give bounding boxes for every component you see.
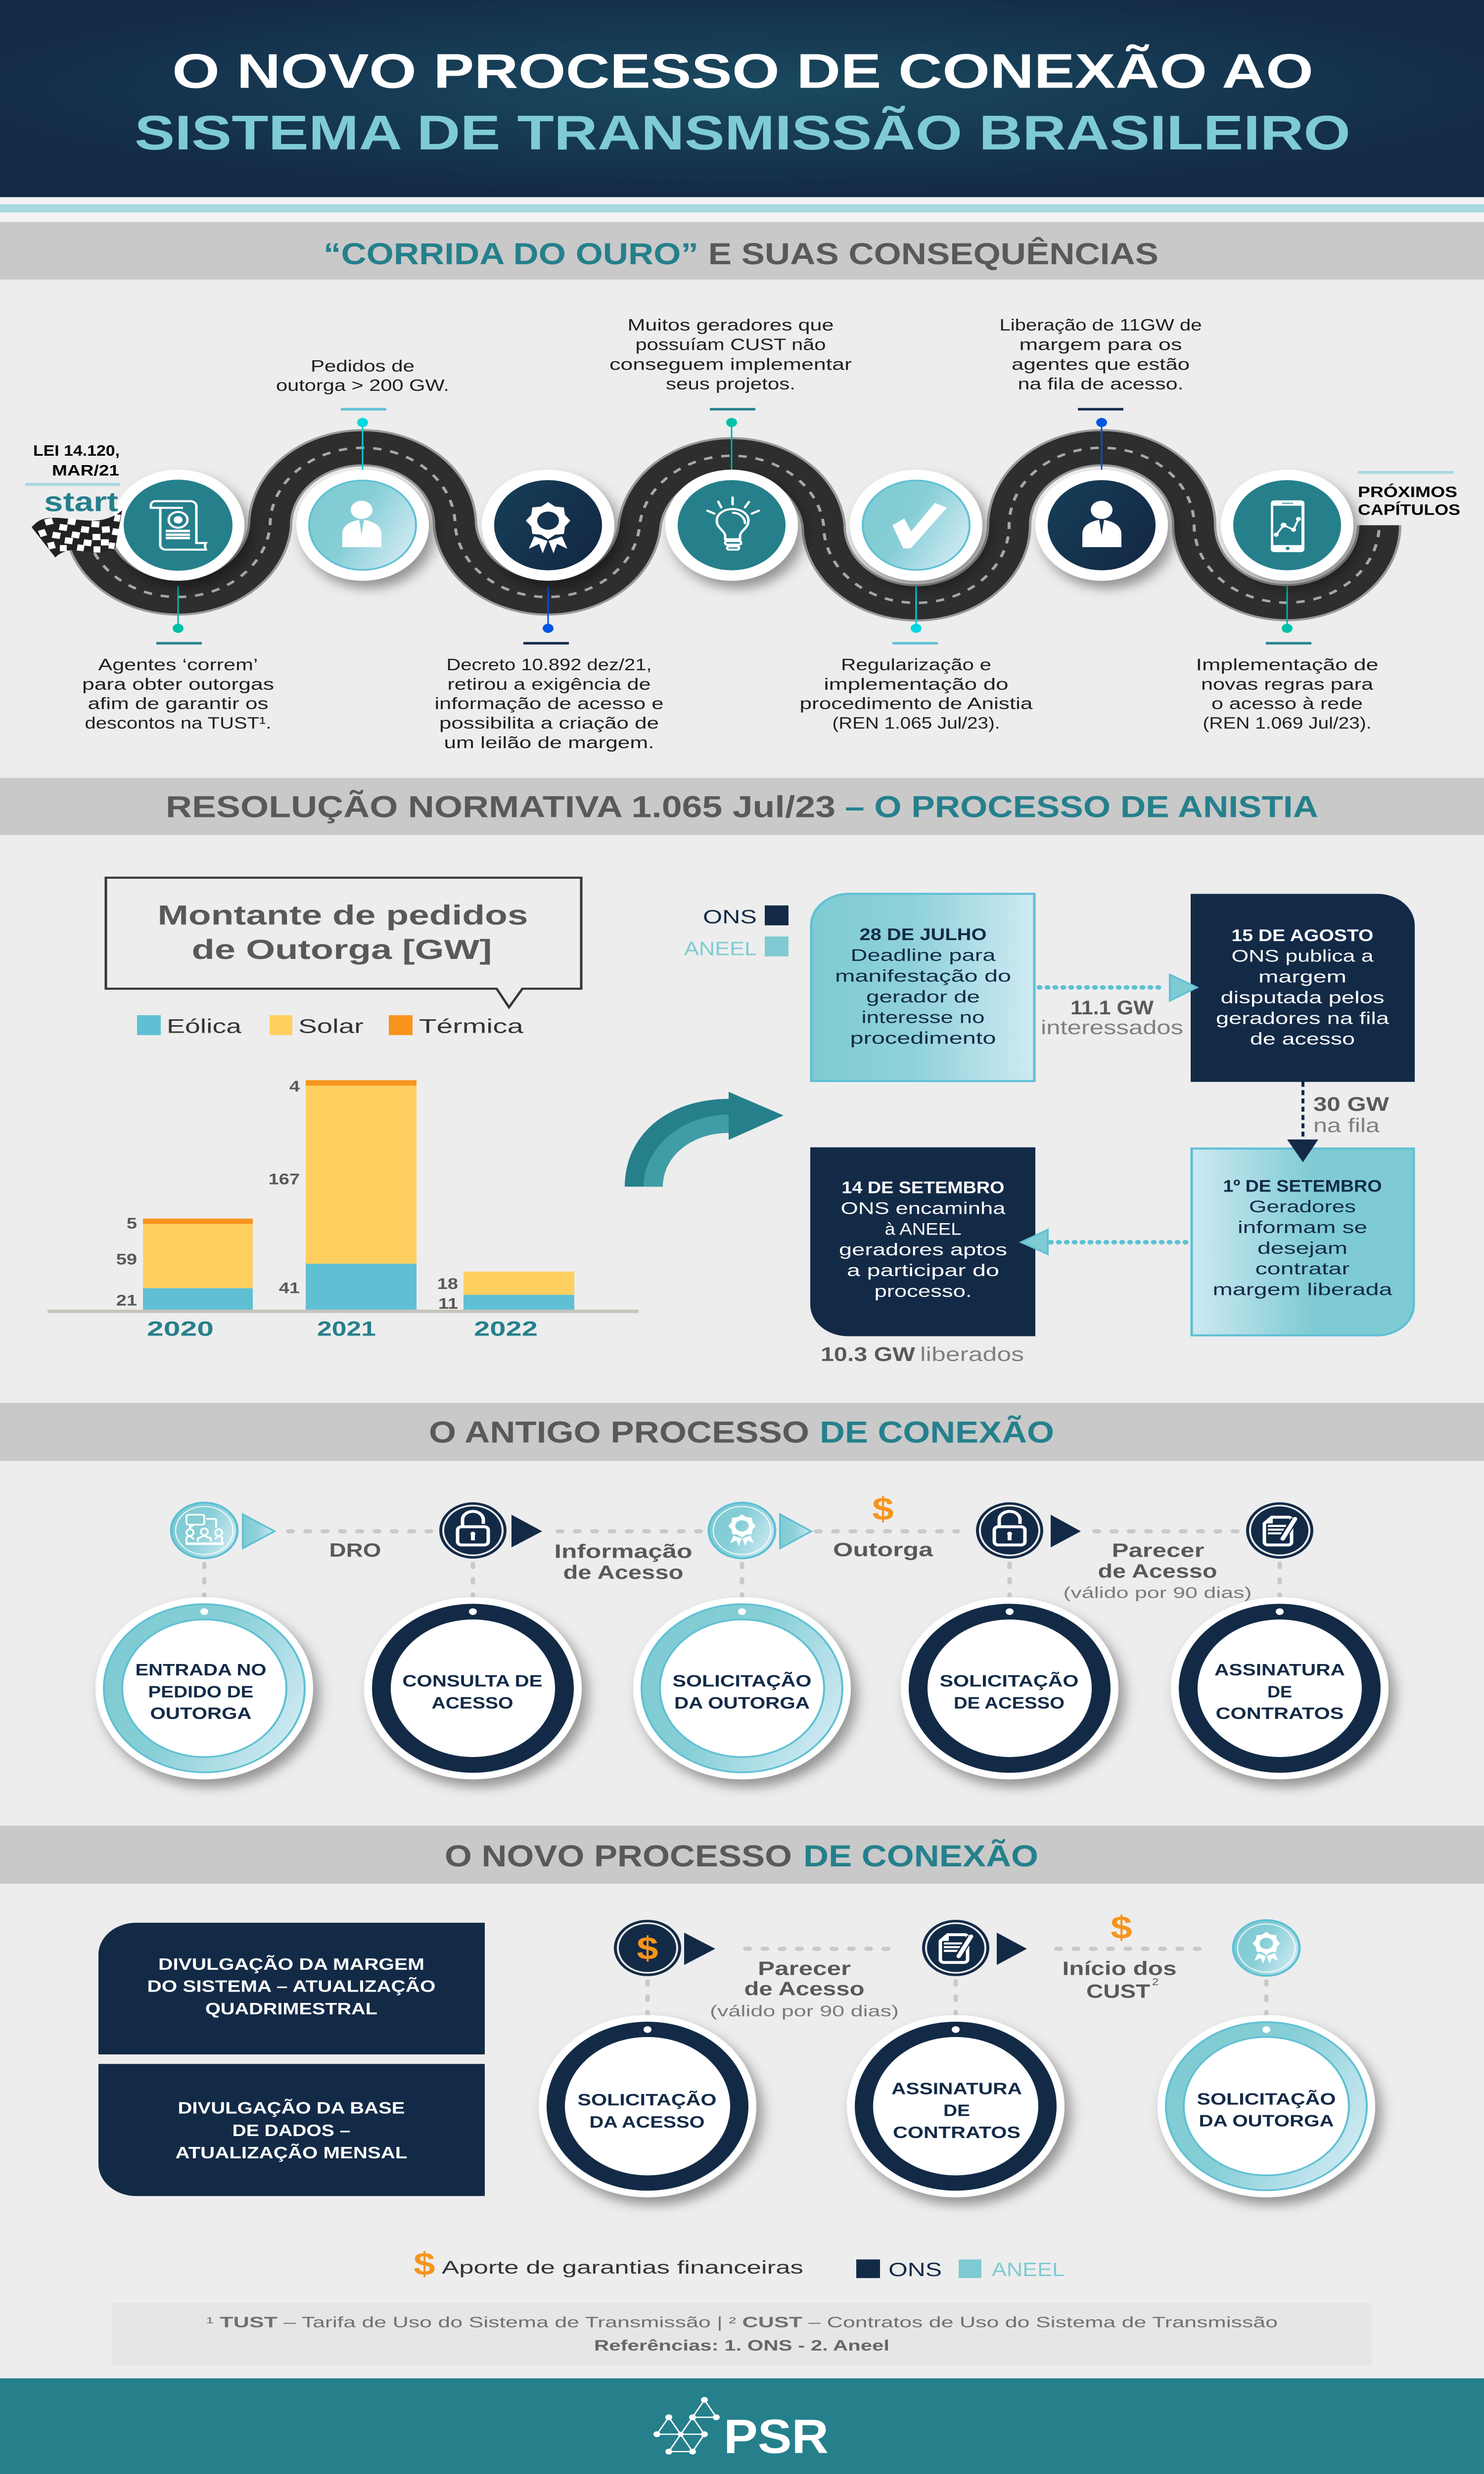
box: 15 de agosto: 15 DE AGOSTO (1232, 926, 1373, 945)
text: implementação: (REN 1.069 Jul/23). (1203, 714, 1371, 732)
circle: solicitação de acesso: SOLICITAÇÃO (940, 1671, 1078, 1690)
footer with PSR logo: PSR (724, 2409, 829, 2463)
box: 1º de setembro: 1º DE SETEMBRO (1223, 1177, 1382, 1196)
box: 15 de agosto: margem (1258, 968, 1346, 987)
text: regularização (799, 655, 1033, 732)
box: 1º de setembro: desejam (1257, 1239, 1347, 1258)
footer with PSR logo (0, 2379, 1484, 2474)
labels: old process: Informação (554, 1541, 692, 1562)
callout: montante de pedidos: Montante de pedidos (158, 900, 528, 930)
pins and connector lines (156, 408, 1311, 645)
circle: assinatura de contratos new: ASSINATURA (891, 2079, 1022, 2098)
connectors: old process (204, 1531, 1280, 1598)
callout: montante de pedidos: de Outorga [GW] (191, 934, 492, 965)
box: divulgação da margem: QUADRIMESTRAL (205, 1999, 377, 2018)
circle: assinatura de contratos (1171, 1597, 1389, 1779)
circle: assinatura de contratos new: DE (943, 2101, 970, 2120)
icon: document (1246, 1502, 1313, 1559)
box: divulgação da margem: DO SISTEMA – ATUALIZAÇÃO (147, 1977, 435, 1996)
text: 10.3 GW liberados: 10.3 GW (821, 1343, 915, 1366)
box: 28 de julho: procedimento (850, 1029, 996, 1048)
section heading: antigo processo: DE CONEXÃO (820, 1416, 1054, 1449)
box: divulgação da base de dados: DE DADOS – (232, 2121, 350, 2140)
bar chart: 11 (438, 1295, 458, 1312)
icon: smartphone chart (1221, 470, 1353, 581)
text: 10.3 GW liberados: liberados (920, 1343, 1024, 1366)
circle: consulta de acesso (364, 1597, 582, 1779)
circle: solicitação de acesso new: SOLICITAÇÃO (577, 2090, 716, 2109)
icon: checkered flag (32, 510, 122, 558)
text: implementação (1196, 655, 1378, 732)
bar chart: 2021 (317, 1317, 376, 1340)
text: liberação de margem: agentes que estão (1012, 355, 1190, 374)
labels: old process: de Acesso (563, 1562, 683, 1583)
section heading: resolução normativa: RESOLUÇÃO NORMATIVA 1.065 Jul/23 (166, 790, 835, 824)
box: 15 de agosto: ONS publica a (1232, 947, 1374, 966)
header panel with title (0, 0, 1484, 222)
connectors: new process (648, 1949, 1266, 2015)
box: 15 de agosto: geradores na fila (1216, 1009, 1390, 1028)
chart legend: Eólica (167, 1015, 241, 1038)
start label: MAR/21 (52, 463, 119, 479)
circle: solicitação de acesso (901, 1597, 1118, 1779)
legend: bottom (414, 2246, 1065, 2282)
circle: assinatura de contratos: CONTRATOS (1216, 1704, 1344, 1722)
bar chart: 2022 (474, 1317, 538, 1340)
box: 1º de setembro (1192, 1148, 1414, 1335)
labels: old process (329, 1491, 1252, 1602)
arrow: 11.1 GW interessados (1039, 975, 1197, 1039)
text: agentes correm (82, 655, 274, 732)
labels: new process: de Acesso (744, 1978, 865, 1999)
text: muitos geradores: conseguem implementar (609, 355, 852, 374)
section heading: antigo processo (0, 1403, 1484, 1461)
text: decreto (434, 655, 664, 752)
box: 14 de setembro (810, 1147, 1035, 1336)
box: 14 de setembro: à ANEEL (884, 1220, 962, 1239)
text: decreto: retirou a exigência de (447, 675, 650, 693)
box: 14 de setembro: geradores aptos (839, 1240, 1007, 1259)
box: 15 de agosto: de acesso (1250, 1030, 1355, 1048)
legend: ONS and ANEEL: ANEEL (684, 938, 757, 959)
text: regularização: Regularização e (841, 655, 991, 674)
section heading: resolução normativa (0, 778, 1484, 835)
section heading: corrida do ouro (0, 222, 1484, 280)
icon: scroll (112, 470, 244, 581)
chart legend: Térmica (419, 1015, 524, 1038)
text: regularização: implementação do (824, 675, 1008, 693)
circle: assinatura de contratos new: CONTRATOS (893, 2123, 1020, 2141)
box: 15 de agosto: disputada pelos (1220, 989, 1384, 1007)
text: pedidos de outorga: outorga > 200 GW. (276, 376, 449, 394)
text: pedidos de outorga: Pedidos de (311, 357, 415, 375)
box: divulgação da base de dados: ATUALIZAÇÃO MENSAL (175, 2143, 408, 2162)
box: 14 de setembro: ONS encaminha (841, 1199, 1006, 1218)
box: divulgação da margem (98, 1923, 485, 2054)
start label: start (44, 486, 118, 517)
chart legend (137, 1015, 524, 1038)
box: 28 de julho: 28 DE JULHO (860, 925, 986, 944)
icon: ribbon badge (482, 470, 614, 581)
header panel with title: SISTEMA DE TRANSMISSÃO BRASILEIRO (135, 105, 1350, 160)
labels: old process: de Acesso (1098, 1561, 1217, 1582)
bar chart: 2020 (147, 1317, 214, 1340)
bar chart (47, 1078, 639, 1340)
icon: person navy (1035, 470, 1168, 581)
arrow: 30 GW na fila: na fila (1313, 1114, 1380, 1137)
icon: dollar: $ (637, 1930, 658, 1966)
box: 14 de setembro: 14 DE SETEMBRO (841, 1179, 1004, 1197)
icon: document new (922, 1920, 1027, 1976)
bar chart: 18 (437, 1275, 458, 1292)
circle: solicitação da outorga new: DA OUTORGA (1199, 2112, 1334, 2130)
bar chart: 5 (127, 1215, 137, 1232)
text: liberação de margem: Liberação de 11GW de (999, 316, 1202, 334)
box: 14 de setembro: a participar do (847, 1261, 999, 1280)
box: divulgação da margem: DIVULGAÇÃO DA MARGEM (158, 1954, 424, 1974)
labels: old process: Outorga (833, 1539, 933, 1560)
circle: consulta de acesso: CONSULTA DE (402, 1672, 542, 1690)
text: regularização: procedimento de Anistia (799, 694, 1033, 713)
text: agentes correm: afim de garantir os (88, 694, 268, 713)
legend: bottom: $ (414, 2246, 435, 2282)
box: 15 de agosto (1191, 894, 1415, 1082)
box: 28 de julho: gerador de (866, 988, 980, 1006)
next chapters label: CAPÍTULOS (1358, 501, 1460, 519)
circle: solicitação da outorga (633, 1597, 851, 1779)
bar chart: 21 (116, 1291, 137, 1309)
box: 28 de julho: manifestação do (835, 967, 1011, 986)
circle: assinatura de contratos: DE (1267, 1682, 1292, 1701)
header panel with title: O NOVO PROCESSO DE CONEXÃO AO (172, 44, 1313, 98)
start label: LEI 14.120, (33, 442, 120, 459)
section heading: corrida do ouro: “CORRIDA DO OURO” E SUAS CONSEQUÊNCIAS (324, 238, 1159, 271)
text: regularização: (REN 1.065 Jul/23). (833, 714, 1000, 732)
footnote box (112, 2303, 1372, 2366)
circle: solicitação de acesso new: DA ACESSO (590, 2113, 704, 2131)
box: 1º de setembro: informam se (1238, 1218, 1367, 1237)
labels: old process: Parecer (1112, 1540, 1205, 1561)
legend: ONS and ANEEL (684, 905, 788, 959)
next chapters label: PRÓXIMOS (1358, 483, 1457, 501)
text: agentes correm: para obter outorgas (82, 675, 274, 693)
labels: new process: (válido por 90 dias) (710, 2002, 899, 2020)
text: muitos geradores: Muitos geradores que (627, 316, 834, 334)
arrow: 30 GW na fila: 30 GW (1313, 1094, 1389, 1115)
box: 1º de setembro: margem liberada (1212, 1281, 1393, 1299)
circle: solicitação de acesso: DE ACESSO (954, 1694, 1065, 1712)
circle: solicitação da outorga new: SOLICITAÇÃO (1197, 2089, 1336, 2108)
circle: entrada no pedido (95, 1597, 313, 1779)
circle: solicitação de acesso new (539, 2015, 756, 2197)
labels: old process: DRO (329, 1539, 381, 1561)
arrow: 11.1 GW interessados: interessados (1041, 1017, 1183, 1039)
legend: bottom: ONS (888, 2259, 942, 2280)
bar chart: 4 (289, 1078, 300, 1095)
box: 28 de julho: Deadline para (851, 946, 996, 965)
text: liberação de margem: margem para os (1019, 335, 1182, 354)
arrow: back to ANEEL (1021, 1230, 1191, 1254)
labels: old process: (válido por 90 dias) (1063, 1584, 1252, 1602)
text: implementação: Implementação de (1196, 655, 1378, 674)
icon: badge new (1233, 1920, 1299, 1976)
icon: person light (296, 470, 429, 581)
circle: solicitação da outorga: SOLICITAÇÃO (672, 1671, 811, 1690)
text: pedidos de outorga (276, 357, 449, 394)
text: agentes correm: descontos na TUST¹. (85, 714, 271, 732)
panel: road timeline (25, 316, 1460, 752)
icon: lock 1 (439, 1502, 542, 1559)
arrow: 30 GW na fila (1287, 1082, 1389, 1162)
section heading: novo processo: O NOVO PROCESSO (445, 1840, 792, 1873)
box: divulgação da base de dados: DIVULGAÇÃO DA BASE (178, 2098, 405, 2117)
text: 10.3 GW liberados (821, 1343, 1024, 1366)
text: liberação de margem: na fila de acesso. (1018, 375, 1183, 393)
chart legend: Solar (298, 1015, 364, 1038)
start label (25, 442, 120, 517)
box: 28 de julho (811, 894, 1034, 1081)
text: muitos geradores: seus projetos. (666, 375, 795, 393)
labels: new process: Parecer (758, 1958, 851, 1979)
circle: consulta de acesso: ACESSO (431, 1694, 513, 1712)
text: decreto: Decreto 10.892 dez/21, (446, 655, 651, 674)
box: 14 de setembro: processo. (875, 1282, 972, 1301)
legend: bottom: ANEEL (992, 2259, 1065, 2280)
legend: bottom: Aporte de garantias financeiras (442, 2257, 803, 2278)
text: implementação: novas regras para (1201, 675, 1374, 693)
box: 28 de julho: interesse no (861, 1008, 984, 1027)
box: divulgação da base de dados (98, 2064, 485, 2196)
circle: solicitação da outorga: DA OUTORGA (674, 1694, 810, 1712)
section heading: resolução normativa: – O PROCESSO DE ANISTIA (845, 790, 1318, 824)
circle: entrada no pedido: OUTORGA (150, 1704, 251, 1722)
bar chart: 167 (269, 1170, 300, 1188)
circle: entrada no pedido: ENTRADA NO (135, 1661, 266, 1679)
circle: assinatura de contratos: ASSINATURA (1214, 1661, 1345, 1679)
callout: montante de pedidos (106, 878, 581, 1007)
circle: solicitação da outorga new (1158, 2015, 1375, 2197)
text: muitos geradores (609, 316, 852, 393)
box: 1º de setembro: contratar (1255, 1260, 1349, 1279)
next chapters label (1358, 471, 1460, 519)
bar chart: 59 (116, 1251, 137, 1268)
text: implementação: o acesso à rede (1211, 694, 1363, 713)
text: decreto: informação de acesso e (434, 694, 664, 713)
text: muitos geradores: possuíam CUST não (635, 335, 826, 354)
text: decreto: possibilita a criação de (439, 714, 659, 732)
bar chart: 41 (279, 1279, 300, 1297)
footnote box: ¹ TUST – Tarifa de Uso do Sistema de Transmissão | ² CUST – Contratos de Uso do Sistema de Transmissão (206, 2314, 1278, 2331)
footnote box: Referências: 1. ONS - 2. Aneel (594, 2337, 889, 2354)
icon: light bulb (665, 470, 798, 581)
section heading: antigo processo: O ANTIGO PROCESSO (429, 1416, 809, 1449)
labels: new process: CUST (1086, 1981, 1150, 2002)
circle: assinatura de contratos new (847, 2015, 1065, 2197)
circle: entrada no pedido: PEDIDO DE (148, 1682, 253, 1701)
text: agentes correm: Agentes ‘correm’ (98, 655, 258, 674)
icon: dollar (614, 1920, 715, 1976)
icon: badge 1 (709, 1503, 811, 1558)
arrow: 11.1 GW interessados: 11.1 GW (1070, 997, 1154, 1019)
arrow: curved (625, 1092, 784, 1187)
labels: new process (710, 1910, 1176, 2020)
labels: new process: Início dos (1062, 1958, 1176, 1979)
labels: old process: $ (872, 1491, 894, 1527)
labels: new process: $ (1111, 1910, 1132, 1946)
labels: new process: 2 (1152, 1976, 1159, 1988)
box: 1º de setembro: Geradores (1249, 1197, 1356, 1216)
road (86, 448, 1379, 603)
text: liberação de margem (999, 316, 1202, 393)
icon: lock 2 (976, 1502, 1081, 1559)
section heading: novo processo: DE CONEXÃO (803, 1840, 1038, 1873)
legend: ONS and ANEEL: ONS (703, 906, 757, 927)
icon: check mark (850, 470, 982, 581)
text: decreto: um leilão de margem. (444, 733, 654, 752)
icon: meeting people (171, 1503, 275, 1558)
section heading: novo processo (0, 1826, 1484, 1884)
